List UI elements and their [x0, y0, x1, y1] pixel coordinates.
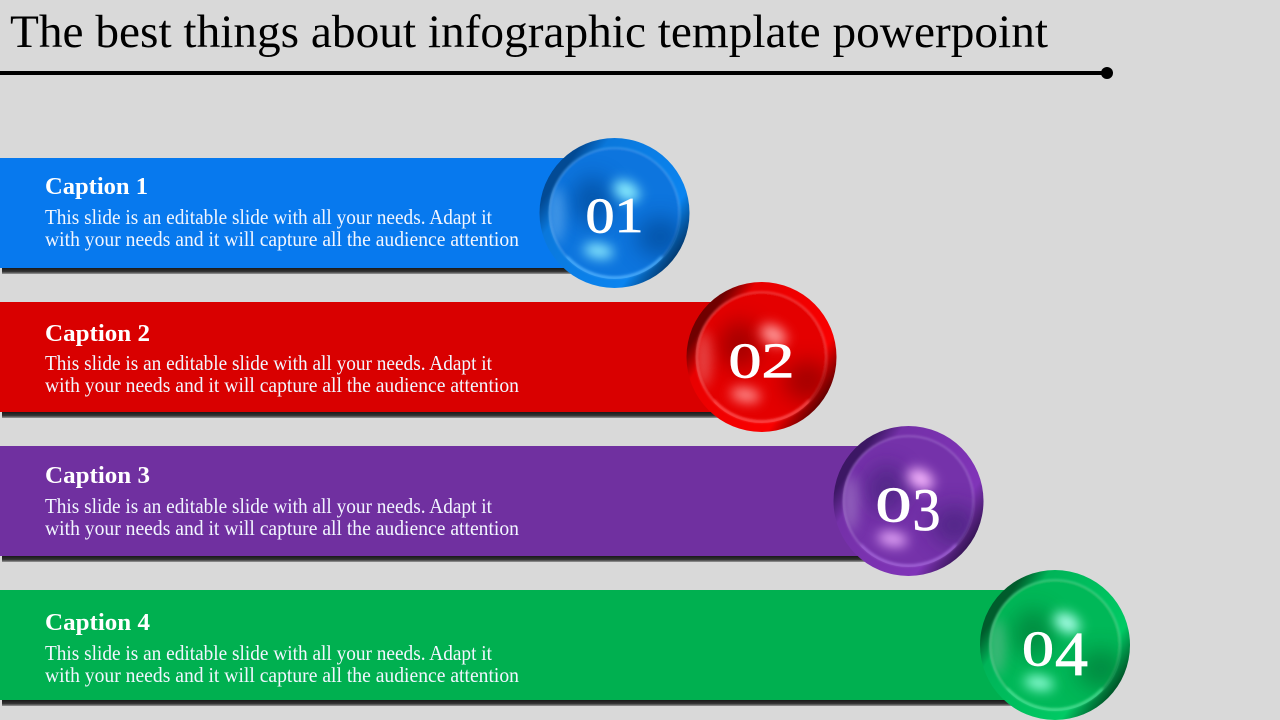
bar shadow 2: [2, 412, 739, 418]
badge 04: [980, 570, 1130, 720]
caption 3 text: This slide is an editable slide with all your needs. Adapt it: [45, 494, 492, 518]
number 04: 4: [1055, 621, 1088, 689]
caption 1 text: This slide is an editable slide with all your needs. Adapt it: [45, 205, 492, 229]
number 03: 3: [912, 477, 940, 543]
bar shadow 4: [2, 700, 1032, 706]
bar 3: [0, 446, 884, 556]
bar 1: [0, 158, 590, 268]
caption 2 text: with your needs and it will capture all the audience attention: [45, 373, 519, 397]
caption 2 text: This slide is an editable slide with all your needs. Adapt it: [45, 351, 492, 375]
bar shadow 3: [2, 556, 886, 562]
number 01: 01: [586, 187, 644, 243]
title rule with end dot: [0, 67, 1113, 79]
caption 2 heading: Caption 2: [45, 321, 150, 347]
bar shadow 1: [2, 268, 592, 274]
caption 4 heading: Caption 4: [45, 610, 150, 636]
caption 1 text: with your needs and it will capture all the audience attention: [45, 227, 519, 251]
caption 3 heading: Caption 3: [45, 463, 150, 489]
number 02: 02: [728, 332, 794, 388]
badge 03: [834, 426, 984, 576]
badge 02: [686, 282, 836, 432]
panel: caption 3: [0, 426, 984, 576]
caption 3 text: with your needs and it will capture all the audience attention: [45, 516, 519, 540]
panel: caption 1: [0, 138, 690, 288]
number 04: 0: [1022, 620, 1054, 676]
panel: caption 4: [0, 570, 1130, 720]
bar 4: [0, 590, 1030, 700]
number 03: 0: [876, 476, 912, 532]
caption 4 text: with your needs and it will capture all the audience attention: [45, 663, 519, 687]
caption 4 text: This slide is an editable slide with all your needs. Adapt it: [45, 641, 492, 665]
badge 01: [540, 138, 690, 288]
caption 1 heading: Caption 1: [45, 174, 148, 200]
bar 2: [0, 302, 737, 412]
panel: caption 2: [0, 282, 836, 432]
title: The best things about infographic template powerpoint: [10, 6, 1048, 58]
